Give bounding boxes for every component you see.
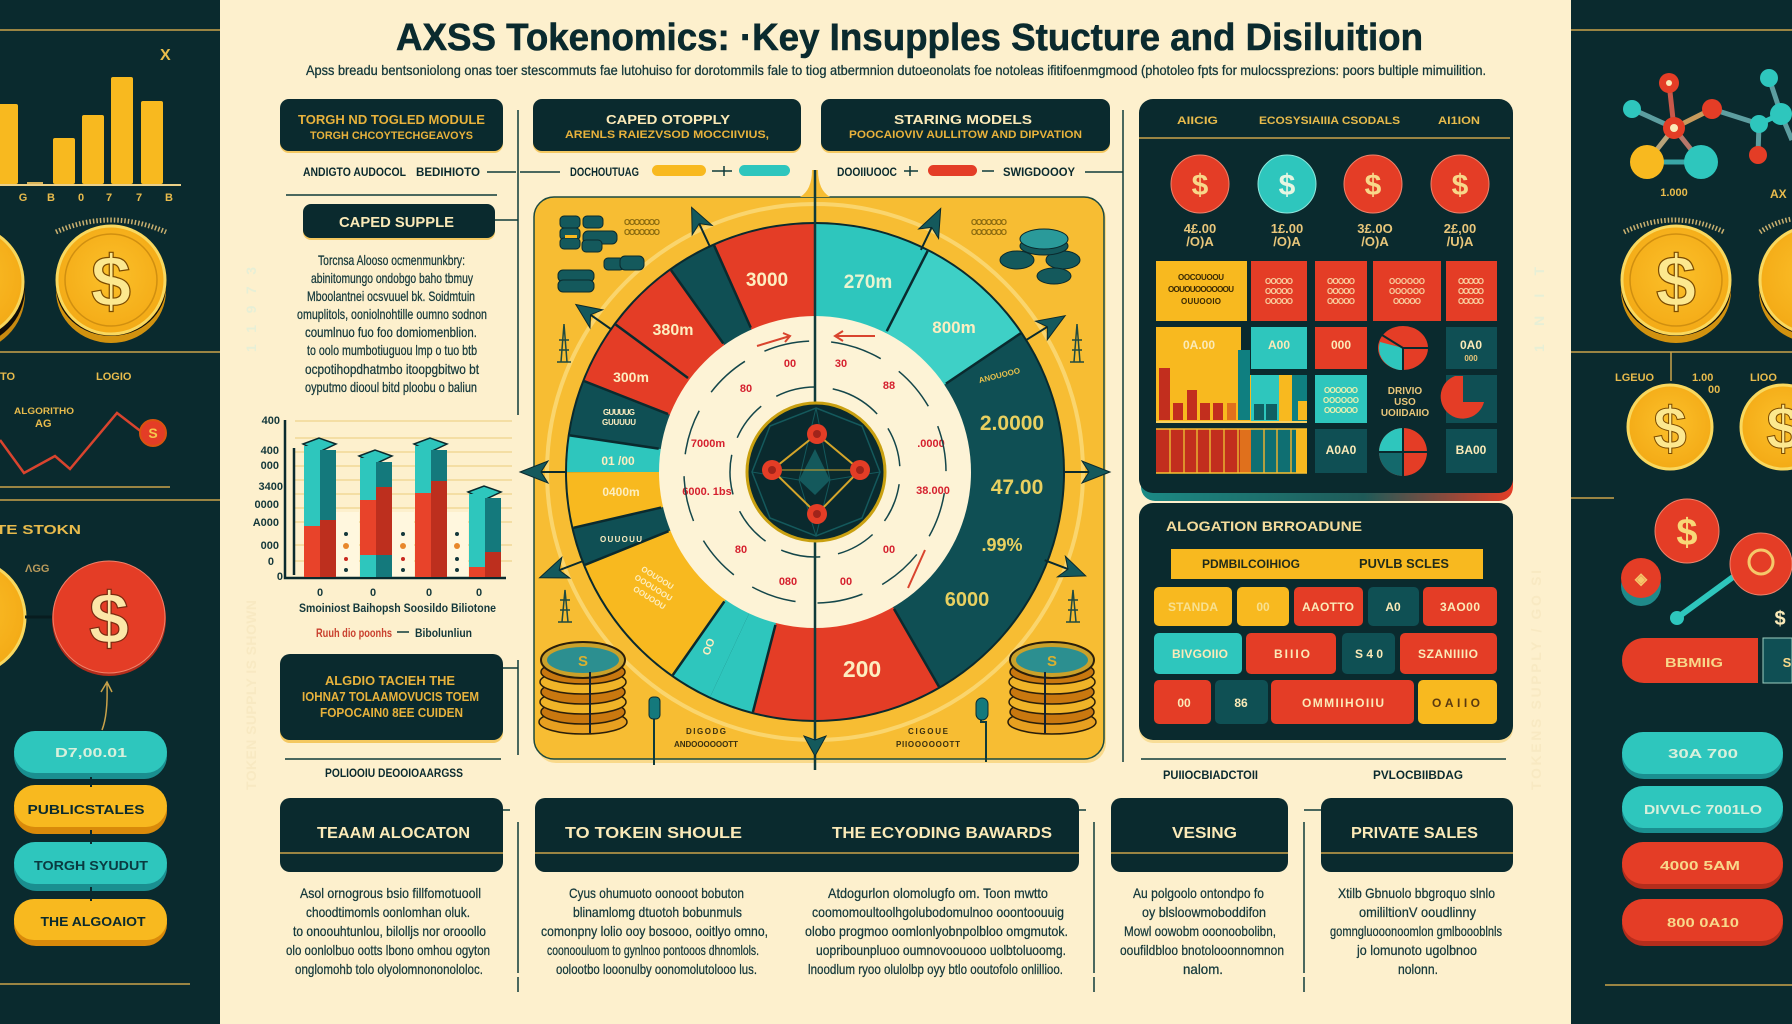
grid row 2: A00 [1268, 338, 1290, 352]
text block: schedule: comonpny lolio ooy bosooo, ooitlyo omno, [541, 923, 768, 939]
legend row: flow labels: DOOIIUOOC [837, 165, 897, 179]
grid row 2: 0A0 [1460, 338, 1482, 352]
bar 3 [414, 438, 447, 577]
labels: segment values: 3000 [746, 270, 788, 291]
faint margin text: 1 N I T [1531, 267, 1547, 352]
allocation row 2: S40 [1355, 647, 1383, 661]
bar chart: supply stacks: A000 [253, 517, 279, 529]
faint margin text lower: TOKEN SUPPLY IS SHOWN [243, 600, 259, 790]
bar 1 [303, 438, 336, 577]
text block: caped supply description: Torcnsa Alooso ocmenmunkbry: [318, 252, 465, 268]
bar chart: supply stacks: 0 [476, 587, 482, 599]
text block: caped supply description [297, 252, 487, 395]
text block: schedule: Cyus ohumuoto oonooot bobuton [569, 885, 744, 901]
icons: pins with captions: PIIOOOOOOTT [896, 740, 960, 749]
arrows: radial spears [520, 203, 1110, 756]
faint margin text lower: TOKENS SUPPLY / GO SI [1528, 570, 1544, 790]
grid row 1 [1156, 261, 1497, 321]
labels: segment values: ANOUOOO [978, 366, 1021, 385]
panel: token schedule and ecosystem rewards: TO TOKEIN SHOULE [565, 825, 742, 842]
grid row 1: OOCOUOOU [1178, 273, 1224, 282]
labels: segment values: GUUUUU [602, 418, 636, 427]
labels: segment values: 200 [843, 656, 881, 682]
bar chart: left sidebar bars [0, 47, 181, 204]
panel: ecosystem models [1139, 99, 1513, 501]
icon: gold coin right partial [1759, 219, 1792, 343]
labels: segment values: 0400m [602, 485, 640, 499]
icon: red token cluster: $ [1676, 512, 1698, 554]
allocation row 3: OMMIIHOIIU [1302, 696, 1384, 710]
pill: staking row: BBMIIG [1665, 655, 1723, 670]
grid row 2: 000 [1331, 338, 1351, 352]
faint margin text: 1 1 9 7 3 [243, 267, 259, 352]
icon: coin stack left [539, 642, 627, 734]
pill: staking row: S [1783, 655, 1792, 670]
panel: caped supple label: CAPED SUPPLE [339, 214, 454, 231]
text block [286, 885, 490, 977]
labels: segment values: OOUOOU [639, 564, 675, 591]
panel: token schedule and ecosystem rewards [535, 798, 1079, 977]
text block: caped supply description: coumlnuo fuo foo domiomenblion. [305, 324, 477, 340]
text block: choodtimomls oonlomhan oluk. [306, 904, 470, 920]
title: AXSS Tokenomics: ·Key Insupples Stucture and Disiluition [396, 17, 1423, 59]
subtitle: Apss breadu bentsoniolong onas toer stescommuts fae lutohuiso for dorotommils fale to tiog atbermnion dutoeonolats foe notoleas ifitifoenmgmood (photoleo fpts for mulocssprezions: poors bultiple mimuilition. [306, 62, 1486, 78]
grid row 1: OOOOO [1265, 297, 1293, 306]
labels: coin values: /U)A [1447, 234, 1474, 249]
faint margin text lower [243, 570, 1544, 790]
icon: red coin: $ [89, 579, 129, 659]
labels: segment values: 6000 [945, 589, 989, 611]
text block: nolonn. [1398, 961, 1438, 977]
allocation row 3: OAIIO [1432, 696, 1480, 710]
pill list: right sidebar: 30A 700 [1668, 746, 1738, 761]
labels: inner ring values: 88 [883, 380, 895, 392]
small annotation text [624, 218, 1007, 237]
grid row 2: 0A.00 [1183, 338, 1215, 352]
icon: central axie hub [747, 403, 885, 541]
text block: rewards [805, 885, 1068, 977]
grid row 1: OOOOOO [1389, 277, 1425, 286]
text block [1120, 885, 1284, 977]
allocation row 1: A0 [1385, 600, 1401, 614]
icons: small derricks [557, 324, 1084, 622]
bar chart: supply stacks: Ruuh dio poonhs [316, 626, 392, 640]
labels: inner ring values: 6000. 1bs [682, 486, 732, 498]
text block: onglomohb tolo olyolomnononololoc. [295, 961, 483, 977]
icon: coin stack right [1008, 642, 1096, 734]
bar chart: left sidebar bars: B [47, 192, 55, 204]
chart: donut segments [534, 191, 1096, 753]
labels: inner ring values [682, 358, 950, 588]
panel: algorithm callout [280, 654, 503, 743]
allocation row 1: AAOTTO [1302, 600, 1354, 614]
text block: ooufildbloo bnotolooonnomnon [1120, 942, 1284, 958]
allocation row 3: 86 [1234, 696, 1248, 710]
grid row 1: OOOOOO [1389, 287, 1425, 296]
labels: coin values: /O)A [1273, 234, 1301, 249]
grid row 4: A0A0 [1326, 443, 1357, 457]
text block: Asol ornogrous bsio fillfomotuooll [300, 885, 481, 901]
panel: private sales: PRIVATE SALES [1351, 825, 1478, 842]
small annotation text: OOOOOOO [624, 228, 660, 237]
icon: gold coin right [1621, 220, 1731, 343]
labels: segment values: 47.00 [991, 476, 1043, 499]
labels: inner ring values: 80 [735, 544, 747, 556]
grid row 1: OOOOO [1458, 277, 1484, 286]
line chart: left sidebar: ALGORITHO [14, 406, 74, 416]
allocation row 3 [1154, 680, 1497, 724]
pill list: left sidebar: THE ALGOAIOT [40, 914, 146, 929]
icons: token coins: $ [1192, 169, 1209, 202]
grid row 1: OOUOUOOOOOOU [1168, 285, 1234, 294]
panel: algorithm callout: FOPOCAIN0 8EE CUIDEN [320, 705, 463, 720]
labels: segment values: 01 /00 [601, 454, 635, 468]
grid row 4 [1156, 428, 1497, 476]
labels: segment values: 300m [613, 369, 649, 385]
legend row: flow labels: BEDIHIOTO [416, 165, 480, 179]
icon: molecule network: 1.000 [1660, 187, 1688, 199]
text block: gomngluooonoomlon gmlboooblnls [1330, 923, 1502, 939]
icon: gold coin partial left [0, 226, 25, 352]
bar chart: supply stacks: 000 [261, 540, 279, 552]
bar 4 [468, 486, 501, 577]
panel: header staking models [821, 99, 1110, 153]
icon: coin stack right: S [1047, 653, 1057, 670]
grid row 1: OOOOO [1265, 287, 1293, 296]
text block: oy blsloowmoboddifon [1142, 904, 1266, 920]
icon: gold coin [56, 220, 166, 343]
panel: caped supple label [303, 204, 495, 240]
labels: inner ring values: 00 [883, 544, 895, 556]
legend row: flow labels: ANDIGTO AUDOCOL [303, 165, 406, 179]
bar chart: left sidebar bars: B [165, 192, 173, 204]
pill list: left sidebar: PUBLICSTALES [28, 802, 145, 817]
legend row: flow labels: SWIGDOOOY [1003, 165, 1075, 179]
labels: below allocation panel: PVLOCBIIBDAG [1373, 768, 1463, 782]
text block: Xtilb Gbnuolo bbgroquo slnlo [1338, 885, 1495, 901]
icon: four-part pie [1379, 428, 1427, 476]
bar chart: left sidebar bars: 0 [78, 192, 84, 204]
panel: algorithm callout: IOHNA7 TOLAAMOVUCIS TOEM [302, 689, 479, 704]
line chart: left sidebar: S [148, 425, 158, 441]
label: right sidebar coin captions: 00 [1708, 384, 1720, 396]
panel: header caped supply [533, 99, 801, 153]
grid row 1: OOOOO [1458, 297, 1484, 306]
icon: red token cluster: ◈ [1634, 571, 1648, 588]
labels: segment values: 800m [932, 318, 976, 337]
icons: pins with captions [649, 697, 988, 765]
grid row 1: OOOOO [1265, 277, 1293, 286]
allocation row 2 [1154, 633, 1497, 674]
icon: molecule network: AX [1770, 187, 1787, 201]
text block: rewards: olobo progmoo oomlonlyobnpolbloo omgmutok. [805, 923, 1068, 939]
label: polygon denominators: POLIOOIU DEOOIOAARGSS [325, 766, 463, 780]
panel: allocation breakdown: PDMBILCOIHIOG [1202, 557, 1300, 571]
text block: Mowl oowobm ooonoobolibn, [1124, 923, 1276, 939]
bar chart: supply stacks: 0 [277, 571, 283, 583]
text block: caped supply description: Mboolantnei ocsvuuel bk. Soidmtuin [307, 288, 475, 304]
grid row 1: OUUOOIO [1181, 297, 1221, 306]
label: sidebar coin note: ΛGG [25, 563, 49, 575]
text block: nalom. [1183, 961, 1223, 977]
label: sidebar coin captions [0, 371, 132, 383]
labels: coin values: /O)A [1361, 234, 1389, 249]
grid row 4: BA00 [1456, 443, 1487, 457]
bar chart: supply stacks: 3400 [259, 481, 283, 493]
icons: pins with captions: CIGOUE [908, 727, 949, 736]
small annotation text: OOOOOOO [971, 228, 1007, 237]
icon: pie chart [1378, 326, 1428, 370]
vertical axis [814, 170, 816, 770]
panel: header token model: TORGH CHCOYTECHGEAVOYS [310, 130, 473, 142]
grid row 3 chart: DRIVIO [1388, 386, 1422, 397]
arrow: pills to red coin [101, 682, 112, 730]
panel: algorithm callout: ALGDIO TACIEH THE [325, 673, 455, 688]
text block: omililtionV ooudlinny [1359, 904, 1476, 920]
icons: pins with captions: ANDOOOOOOTT [674, 740, 738, 749]
icons: pins with captions: DIGODG [686, 727, 726, 736]
pill list: left sidebar: D7,00.01 [55, 745, 127, 760]
labels: inner ring values: 80 [740, 383, 752, 395]
allocation row 3: 00 [1177, 696, 1191, 710]
text block: caped supply description: oyputmo diooul bitd ploobu o baliun [305, 379, 477, 395]
labels: coin values: 1£.00 [1271, 221, 1303, 236]
bar chart: left sidebar bars: X [160, 47, 171, 64]
text block: jo lomunoto ugolbnoo [1356, 942, 1477, 958]
allocation row 1: STANDA [1168, 600, 1218, 614]
small annotation text: OOOOOOO [971, 218, 1007, 227]
icon: red token cluster: $ [1774, 608, 1786, 630]
bar chart: left sidebar bars: 7 [136, 192, 142, 204]
grid row 3 chart [1156, 350, 1497, 423]
pill list: right sidebar: 800 0A10 [1667, 915, 1739, 930]
icon: gold coin lower right partial [1741, 385, 1792, 469]
labels: segment values: OOOUOOU [633, 573, 674, 603]
bar chart: supply stacks [253, 415, 512, 640]
icons: token coins: $ [1452, 169, 1469, 202]
label: right sidebar coin captions: 1.00 [1692, 372, 1713, 384]
allocation row 1: 00 [1256, 600, 1270, 614]
bar chart: supply stacks: 400 [261, 445, 279, 457]
line chart: left sidebar [0, 406, 166, 473]
icon: red pie [1441, 376, 1484, 419]
icons: token coins: $ [1365, 169, 1382, 202]
text block: schedule: coonoouluom to gynlnoo pontooos dhnomlols. [547, 942, 759, 958]
pill list: right sidebar: 4000 5AM [1660, 858, 1740, 873]
grid row 1: OOOOO [1327, 287, 1355, 296]
icon: gold coin right: $ [1656, 242, 1696, 322]
panel: header staking models: STARING MODELS [894, 112, 1032, 127]
grid row 3 chart: OOOOOO [1324, 406, 1358, 415]
icon: red coin [25, 561, 166, 676]
grid row 3 chart: USO [1394, 397, 1416, 408]
labels: segment values: OOUOOU [631, 584, 667, 611]
text block: caped supply description: omuplitols, ooniolnohtille oumno sodnon [297, 306, 487, 322]
small annotation text: OOOOOOO [624, 218, 660, 227]
pill list: right sidebar [1622, 732, 1783, 946]
icon: molecule network [1623, 69, 1792, 201]
bar chart: supply stacks: 0 [317, 587, 323, 599]
text block: rewards: uopribounpluoo oumnovoouooo uolbtoluoomg. [816, 942, 1066, 958]
panel: header caped supply: ARENLS RAIEZVSOD MOCCIIVIUS, [565, 129, 769, 141]
labels: inner ring values: 00 [840, 576, 852, 588]
label: right sidebar coin captions: LGEUO [1615, 372, 1655, 384]
panel: allocation breakdown: PUVLB SCLES [1359, 556, 1449, 571]
labels: inner ring values: .0000 [917, 438, 945, 450]
line chart: left sidebar: AG [35, 418, 52, 430]
text block: olo oonlolbuo ootts lbono omhou ogyton [286, 942, 490, 958]
allocation row 2: BIVGOIIO [1172, 647, 1228, 661]
label: right sidebar coin captions [1615, 372, 1777, 396]
grid row 3 chart: OOOOOO [1323, 396, 1359, 405]
panel: header caped supply: CAPED OTOPPLY [606, 112, 730, 127]
bar chart: supply stacks: 0000 [255, 499, 279, 511]
labels: inner ring values: 30 [835, 358, 847, 370]
labels: coin values: /O)A [1186, 234, 1214, 249]
label: sidebar coin captions: TO [0, 371, 16, 383]
bar chart: supply stacks: 000 [261, 460, 279, 472]
labels: segment values: 270m [844, 272, 892, 293]
icon: red token cluster [1621, 499, 1792, 630]
icon: gold coin partial lower [0, 560, 25, 674]
icons: token coins [1171, 155, 1489, 213]
text block: caped supply description: abinitomungo ondobgo baho tbmuy [311, 270, 473, 286]
icon: gold coin: $ [91, 242, 131, 322]
labels: inner ring values: 080 [779, 576, 797, 588]
legend row: flow labels [303, 165, 1075, 179]
icons: token coins: $ [1279, 169, 1296, 202]
text block: to onoouhtunlou, bilolljs nor orooollo [293, 923, 486, 939]
label: right sidebar coin captions: LIOO [1750, 372, 1777, 384]
panel: right sidebar [1571, 0, 1792, 1024]
panel: central wheel [520, 170, 1110, 770]
pill: staking row [1622, 638, 1792, 683]
labels: segment values: OO [701, 636, 718, 657]
panel: private sales [1321, 798, 1513, 977]
pill list: left sidebar [14, 731, 167, 946]
text block: rewards: Atdogurlon olomolugfo om. Toon mwtto [828, 885, 1048, 901]
labels: segment values [600, 270, 1044, 682]
labels: segment values: OUUOUU [600, 535, 642, 544]
labels: inner ring values: 38.000 [916, 485, 950, 497]
legend row: flow labels: DOCHOUTUAG [570, 165, 639, 179]
panel: ecosystem models: AIICIG [1177, 115, 1218, 127]
icon: token stack top right [1000, 229, 1080, 284]
labels: segment values: GUUUUG [603, 408, 635, 417]
labels: inner ring values: 00 [784, 358, 796, 370]
text block: Au polgoolo ontondpo fo [1133, 885, 1264, 901]
panel: team allocation [280, 798, 503, 977]
labels: below allocation panel: PUIIOCBIADCTOII [1163, 768, 1258, 782]
grid row 1: OOOOO [1393, 297, 1421, 306]
labels: coin values: 4£.00 [1184, 221, 1216, 236]
pill list: left sidebar: TORGH SYUDUT [34, 858, 148, 873]
bar chart: supply stacks: 0 [370, 587, 376, 599]
panel: header staking models: POOCAIOVIV AULLITOW AND DIPVATION [849, 129, 1082, 141]
labels: inner ring values: 7000m [691, 438, 725, 450]
faint margin text [243, 267, 1547, 352]
allocation row 2: BIIIO [1274, 647, 1310, 661]
inner ring arcs [663, 320, 967, 624]
labels: segment values: 380m [653, 322, 693, 339]
bar chart: supply stacks: Bibolunliun [415, 626, 472, 640]
panel: header token model: TORGH ND TOGLED MODULE [298, 112, 485, 127]
panel: allocation breakdown: ALOGATION BRROADUNE [1166, 518, 1362, 534]
grid row 2 [1156, 326, 1497, 375]
icon: coin stack left: S [578, 653, 588, 670]
bar chart: supply stacks: 0 [268, 556, 274, 568]
labels: coin values: 3£.0O [1357, 221, 1393, 236]
icon: token stack top left [558, 216, 644, 292]
grid row 3 chart: UOIIDAIIO [1381, 408, 1429, 419]
allocation row 1 [1154, 587, 1497, 626]
text block: rewards: lnoodlum ryoo olulolbp oyy btlo ooutofolo onlillioo. [808, 961, 1063, 977]
panel: vesting: VESING [1172, 825, 1237, 842]
panel: ecosystem models: ECOSYSIAIIIA CSODALS [1259, 115, 1400, 127]
text block: caped supply description: to oolo mumbotiuguou lmp o tuo btb [307, 342, 477, 358]
text block: rewards: coomomoultoolhgolubodomulnoo ooontoouuig [812, 904, 1064, 920]
pill list: right sidebar: DIVVLC 7001LO [1644, 802, 1762, 817]
label: sidebar coin captions: LOGIO [96, 371, 132, 383]
grid row 2: 000 [1464, 354, 1478, 363]
panel: ecosystem models: AI1ION [1438, 115, 1480, 127]
bar 2 [359, 450, 392, 577]
bar chart: left sidebar bars: 7 [106, 192, 112, 204]
bar chart: left sidebar bars: G [19, 192, 27, 204]
grid row 1: OOOOO [1327, 277, 1355, 286]
allocation row 2: SZANIIIIO [1418, 647, 1478, 661]
grid row 1: OOOOO [1327, 297, 1355, 306]
panel: vesting [1111, 798, 1288, 977]
text block [1330, 885, 1502, 977]
bar chart: supply stacks: 0 [426, 587, 432, 599]
panel: header token model [280, 99, 503, 153]
icon: gold coin lower right [1628, 385, 1712, 469]
panel: token schedule and ecosystem rewards: THE ECYODING BAWARDS [832, 825, 1052, 842]
labels: below allocation panel [1163, 768, 1463, 782]
bar chart: supply stacks: Smoiniost Baihopsh Soosildo Biliotone [299, 601, 496, 615]
panel: left sidebar [0, 0, 220, 1024]
allocation row 1: 3AO00 [1440, 600, 1480, 614]
icon: gold coin lower right: $ [1653, 395, 1687, 462]
labels: coin values [1184, 221, 1476, 249]
text block: schedule: oolootbo looonulby oonomolutolooo lus. [556, 961, 757, 977]
grid row 1: OOOOO [1458, 287, 1484, 296]
labels: segment values: .99% [981, 535, 1023, 555]
text block: schedule [541, 885, 768, 977]
labels: coin values: 2£,00 [1444, 221, 1476, 236]
text block: caped supply description: ocpotihopdhatmbo itoopgbitwo bt [305, 361, 479, 377]
bar chart: supply stacks: 400 [262, 415, 280, 427]
connector rails [285, 110, 1506, 992]
grid row 3 chart: OOOOOO [1324, 386, 1358, 395]
panel: allocation breakdown [1139, 503, 1513, 743]
panel: team allocation: TEAAM ALOCATON [317, 825, 470, 842]
labels: segment values: 2.0000 [980, 412, 1044, 435]
text block: schedule: blinamlomg dtuotoh bobunmuls [573, 904, 742, 920]
